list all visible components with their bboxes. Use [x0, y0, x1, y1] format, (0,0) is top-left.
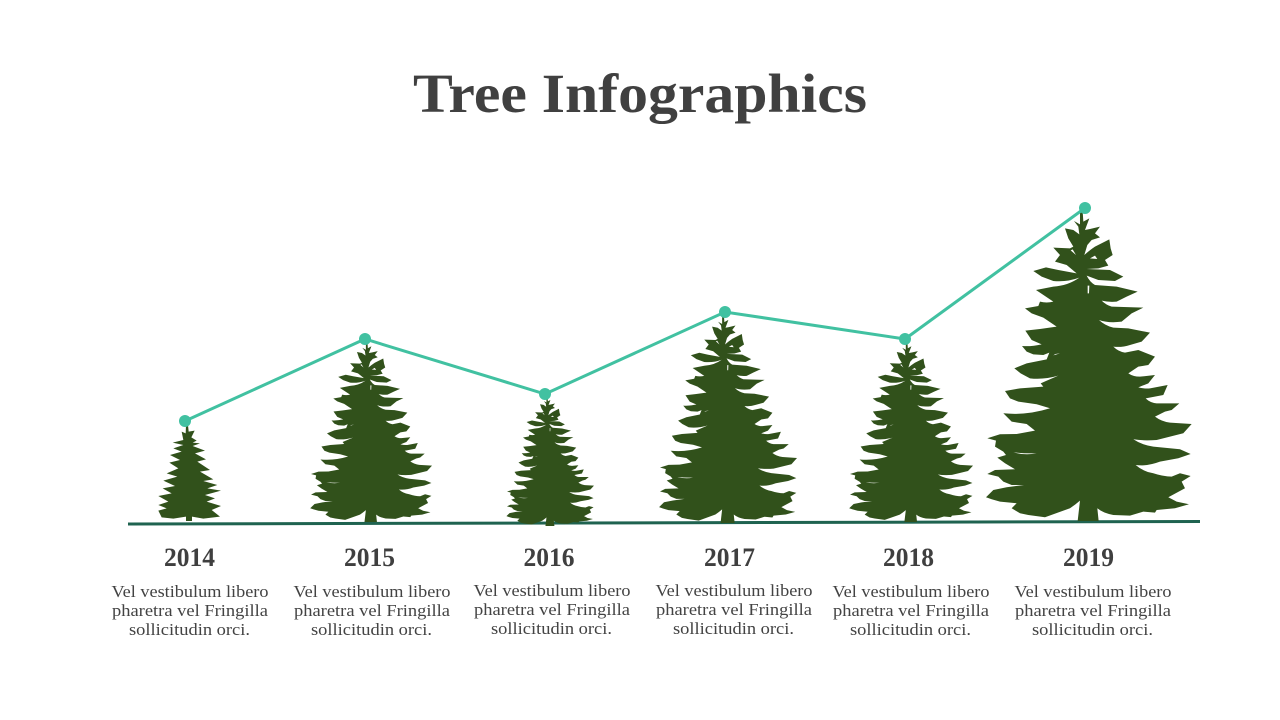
tree 2016 [506, 397, 594, 526]
column 2016 [474, 543, 631, 638]
column 2014 [112, 543, 269, 639]
column 2017: 2017 [704, 543, 755, 572]
tree 2018 [849, 342, 973, 522]
column 2014: Vel vestibulum libero [112, 582, 268, 601]
tree 2019 [986, 211, 1192, 521]
ground line [128, 522, 1200, 524]
column 2017: sollicitudin orci. [673, 619, 794, 638]
column 2016: pharetra vel Fringilla [474, 600, 631, 619]
title: Tree Infographics [413, 63, 867, 124]
column 2018: sollicitudin orci. [850, 620, 971, 639]
tree 2017 [659, 315, 797, 523]
growth line with markers [179, 202, 1091, 427]
column 2019 [1014, 543, 1172, 639]
column 2019: 2019 [1063, 543, 1114, 572]
column 2018: pharetra vel Fringilla [833, 601, 990, 620]
column 2015: Vel vestibulum libero [294, 582, 450, 601]
column 2016: 2016 [524, 543, 574, 572]
column 2017 [656, 543, 813, 638]
column 2014: pharetra vel Fringilla [112, 601, 269, 620]
column 2018 [832, 543, 990, 639]
column 2016: Vel vestibulum libero [474, 581, 630, 600]
column 2014: 2014 [164, 543, 215, 572]
column 2015: sollicitudin orci. [311, 620, 432, 639]
column 2019: Vel vestibulum libero [1014, 582, 1172, 601]
column 2017: Vel vestibulum libero [656, 581, 812, 600]
column 2019: pharetra vel Fringilla [1015, 601, 1172, 620]
column 2018: 2018 [883, 543, 934, 572]
column 2018: Vel vestibulum libero [832, 582, 990, 601]
column 2014: sollicitudin orci. [129, 620, 250, 639]
column 2015 [294, 543, 451, 639]
column 2019: sollicitudin orci. [1032, 620, 1153, 639]
column 2015: pharetra vel Fringilla [294, 601, 451, 620]
tree 2014 [158, 425, 221, 521]
column 2016: sollicitudin orci. [491, 619, 612, 638]
column 2017: pharetra vel Fringilla [656, 600, 813, 619]
column 2015: 2015 [344, 543, 395, 572]
tree 2015 [310, 342, 432, 522]
